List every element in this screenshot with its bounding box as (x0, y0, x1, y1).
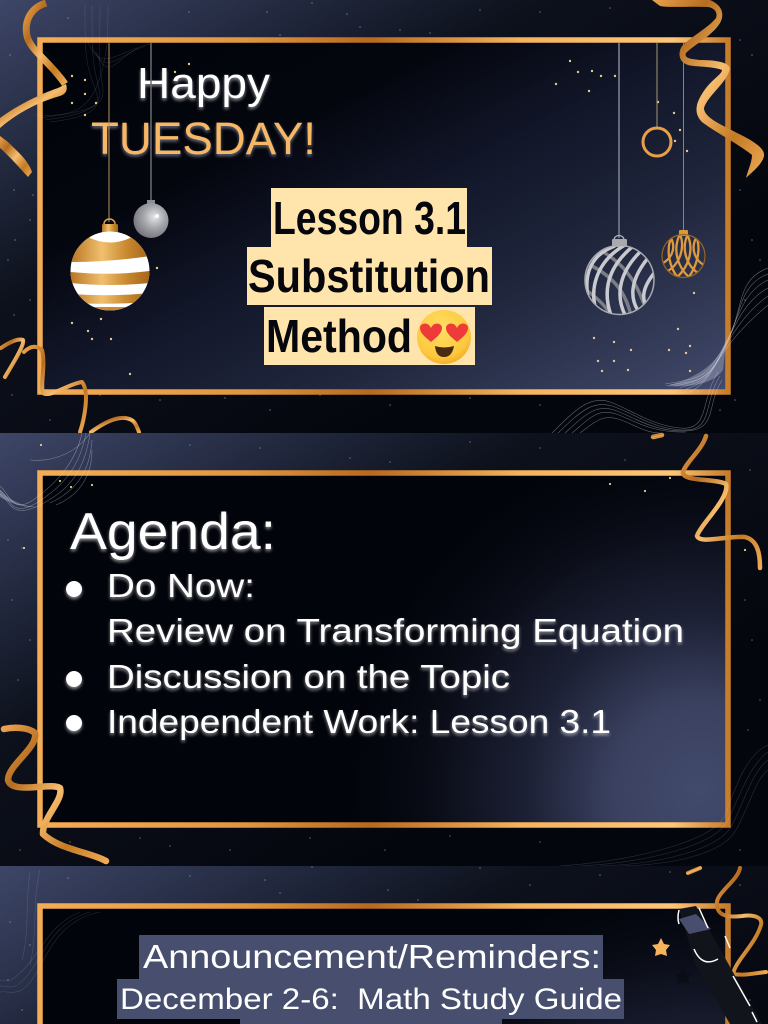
slide 1: title slide (0, 0, 768, 433)
ribbon: left (4, 728, 106, 861)
slide 3 gold frame (40, 906, 728, 1024)
mesh wave: top left (0, 433, 92, 510)
announcement highlight blocks (117, 935, 624, 1024)
ornament: silver swirl bauble (585, 43, 655, 320)
agenda list (66, 567, 684, 740)
lesson title: line 3: Method (266, 310, 412, 362)
ornament: gold lattice bauble (661, 43, 706, 278)
item: Review on Transforming Equation: Review on Transforming Equation (107, 612, 684, 649)
ribbon: top left (0, 3, 67, 177)
ribbon: right (653, 435, 760, 568)
bullet 1 (66, 581, 82, 597)
agenda heading: Agenda: (70, 503, 276, 561)
icon: heart-eyes emoji (417, 310, 471, 364)
slide 3 inner panel (40, 906, 728, 1024)
announcement heading: Announcement/Reminders: (143, 938, 601, 975)
heading: Happy: Happy (137, 59, 270, 108)
slide 1 background stars (8, 3, 760, 420)
icon: marker pen (678, 906, 762, 1024)
slide 3 background stars (8, 867, 750, 1010)
item: Independent Work: Independent Work: Lesson 3.1 (107, 703, 611, 740)
slide 2: agenda (0, 433, 768, 866)
bullet 2 (66, 671, 82, 687)
mesh wave: bottom right (552, 268, 768, 433)
ornament: small silver bauble (134, 43, 168, 238)
ribbon: bottom left (1, 339, 139, 432)
lesson title: line 1: Lesson 3.1 (273, 192, 466, 244)
slide 2 background (0, 433, 768, 866)
bullet 3 (66, 715, 82, 731)
slide 2 background stars (8, 442, 760, 850)
icon: dark star (675, 968, 691, 984)
gold sparkle dots (24, 445, 745, 550)
gold sparkle dots (72, 61, 694, 374)
heading: TUESDAY!: TUESDAY! (91, 113, 316, 164)
item: Do Now: Do Now: (107, 567, 255, 604)
mesh wave: top left (0, 870, 100, 992)
mesh wave: top left (35, 5, 150, 122)
ribbon: right (688, 868, 766, 975)
slide 1 inner panel with gold frame (40, 40, 728, 392)
announcement: study guide line: December 2-6: Math Study Guide (120, 983, 622, 1016)
lesson title: highlight blocks (247, 188, 492, 365)
ribbon: top right (652, 0, 764, 178)
ornament: gold striped bauble (70, 43, 150, 312)
slide 2 inner panel with gold frame (40, 473, 728, 825)
ornament: gold ring (643, 43, 671, 156)
slide 3: announcements (0, 866, 768, 1024)
slide 3 background (0, 866, 768, 1024)
icon: gold star (652, 938, 670, 956)
lesson title: line 2: Substitution (248, 250, 490, 302)
item: Discussion on the Topic: Discussion on the Topic (107, 658, 510, 695)
slide 1 background (0, 0, 768, 433)
mesh wave: bottom right (560, 745, 768, 866)
